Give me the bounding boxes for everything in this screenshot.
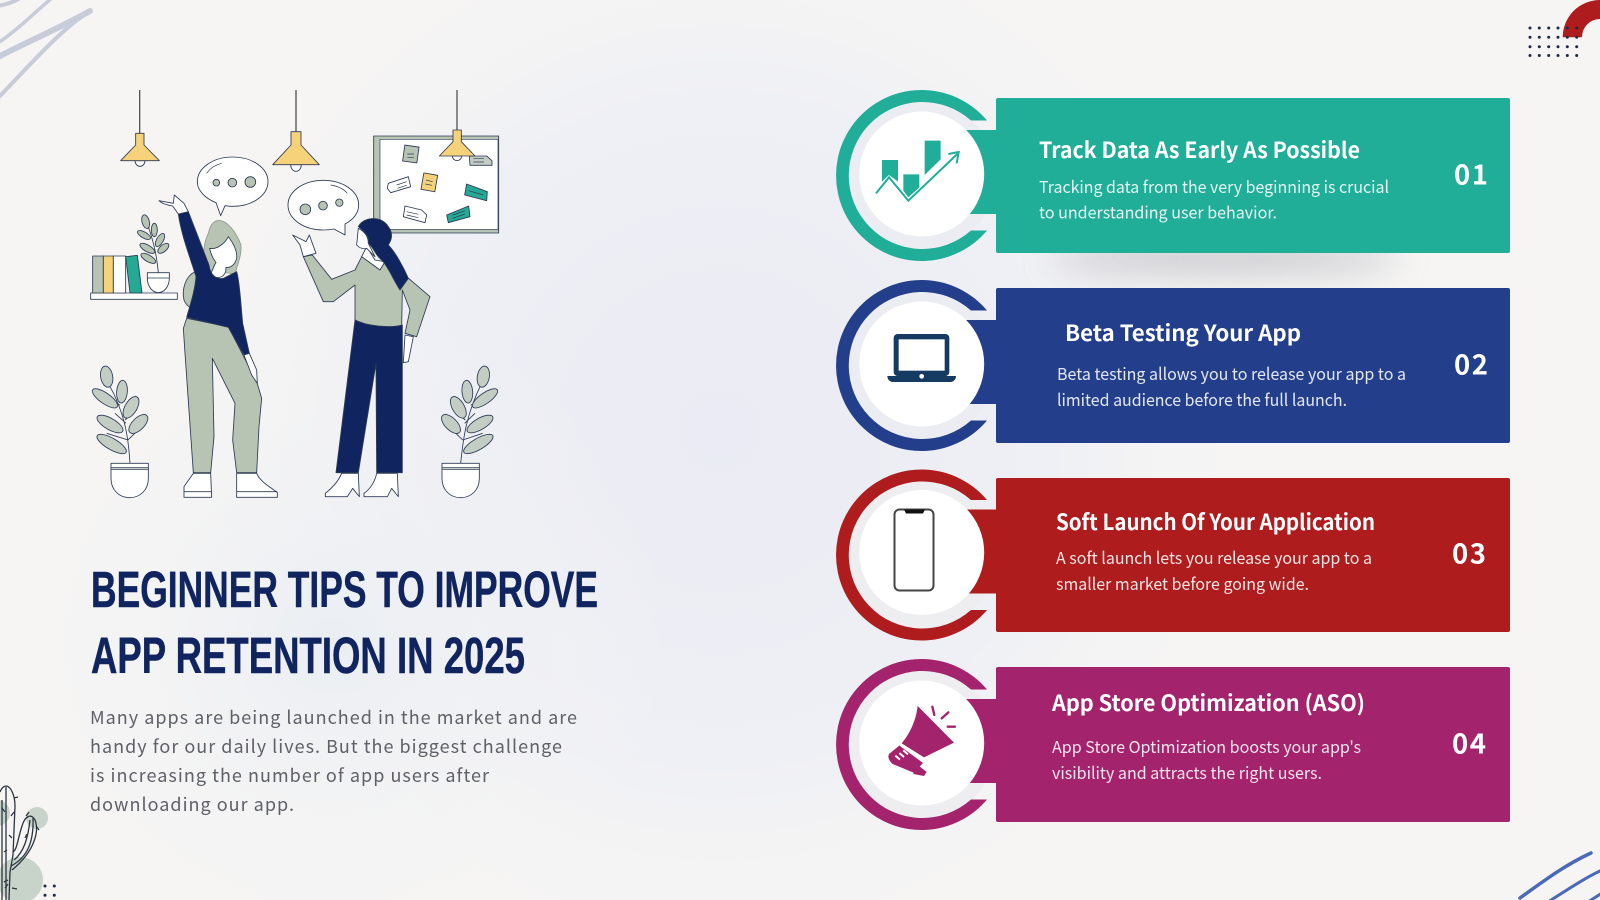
left floor plant xyxy=(90,365,151,498)
right woman xyxy=(293,219,430,497)
tip 4 heading: App Store Optimization (ASO) xyxy=(1051,686,1365,718)
tip 4 number: 04 xyxy=(1452,722,1486,762)
lamp left xyxy=(121,90,159,166)
tip 1 heading: Track Data As Early As Possible xyxy=(1039,133,1360,165)
intro paragraph: is increasing the number of app users after xyxy=(90,762,490,788)
card shadow xyxy=(1050,242,1400,274)
tip 3 description: A soft launch lets you release your app to a xyxy=(1056,545,1372,569)
shelf with books and plant xyxy=(91,214,177,299)
tip 2 ring xyxy=(836,280,997,451)
tip 3 ring xyxy=(836,470,997,640)
tip 1 description xyxy=(1039,174,1389,224)
left woman xyxy=(159,195,277,497)
speech bubble 2 xyxy=(288,180,359,235)
tip 3 heading: Soft Launch Of Your Application xyxy=(1056,505,1375,537)
tip 2 heading: Beta Testing Your App xyxy=(1065,316,1301,348)
intro paragraph xyxy=(90,704,577,817)
tip 3 number: 03 xyxy=(1452,532,1486,572)
decoration: bottom-left cactus xyxy=(0,786,56,900)
tip 1 number: 01 xyxy=(1454,152,1488,192)
icon: laptop xyxy=(887,334,956,382)
panel: tip 4 xyxy=(836,659,1510,830)
tip 1 ring xyxy=(836,90,997,261)
title xyxy=(91,561,598,684)
tip 1 description: to understanding user behavior. xyxy=(1039,200,1277,224)
lamp right xyxy=(439,90,475,161)
tip 4 description: visibility and attracts the right users. xyxy=(1052,760,1322,784)
decoration: top-left scribble xyxy=(0,0,90,98)
tip 2 number: 02 xyxy=(1454,342,1488,382)
icon: chart with arrow xyxy=(876,141,959,201)
right floor plant xyxy=(438,365,500,498)
tip 4 ring xyxy=(836,659,997,830)
tip 1 card xyxy=(996,98,1510,253)
tip 3 description: smaller market before going wide. xyxy=(1056,571,1309,595)
intro paragraph: handy for our daily lives. But the biggest challenge xyxy=(90,733,562,759)
tip 1 description: Tracking data from the very beginning is crucial xyxy=(1039,174,1389,198)
tip 2 description: Beta testing allows you to release your app to a xyxy=(1057,361,1406,385)
decoration: bottom-right scribble xyxy=(1520,853,1600,900)
lamp middle xyxy=(273,90,319,171)
tip 4 description xyxy=(1052,734,1361,784)
tip 4 description: App Store Optimization boosts your app's xyxy=(1052,734,1361,758)
icon: smartphone xyxy=(894,510,934,590)
tip 2 description xyxy=(1057,361,1406,411)
decoration: top-right arc and dots xyxy=(1528,0,1600,57)
tip 4 card xyxy=(996,667,1510,822)
illustration: two women at a whiteboard xyxy=(90,90,500,498)
tip 2 description: limited audience before the full launch. xyxy=(1057,387,1347,411)
title: BEGINNER TIPS TO IMPROVE xyxy=(91,561,598,618)
title: APP RETENTION IN 2025 xyxy=(91,627,525,684)
panel: tip 2 xyxy=(836,280,1510,451)
intro paragraph: downloading our app. xyxy=(90,791,294,817)
whiteboard with notes xyxy=(374,136,499,233)
tip 3 card xyxy=(996,478,1510,632)
panel: tip 3 xyxy=(836,470,1510,640)
icon: megaphone xyxy=(888,706,955,776)
panel: tip 1 xyxy=(836,90,1510,261)
tip 2 card xyxy=(996,288,1510,443)
intro paragraph: Many apps are being launched in the market and are xyxy=(90,704,577,730)
speech bubble 1 xyxy=(197,157,268,216)
tip 3 description xyxy=(1056,545,1372,595)
